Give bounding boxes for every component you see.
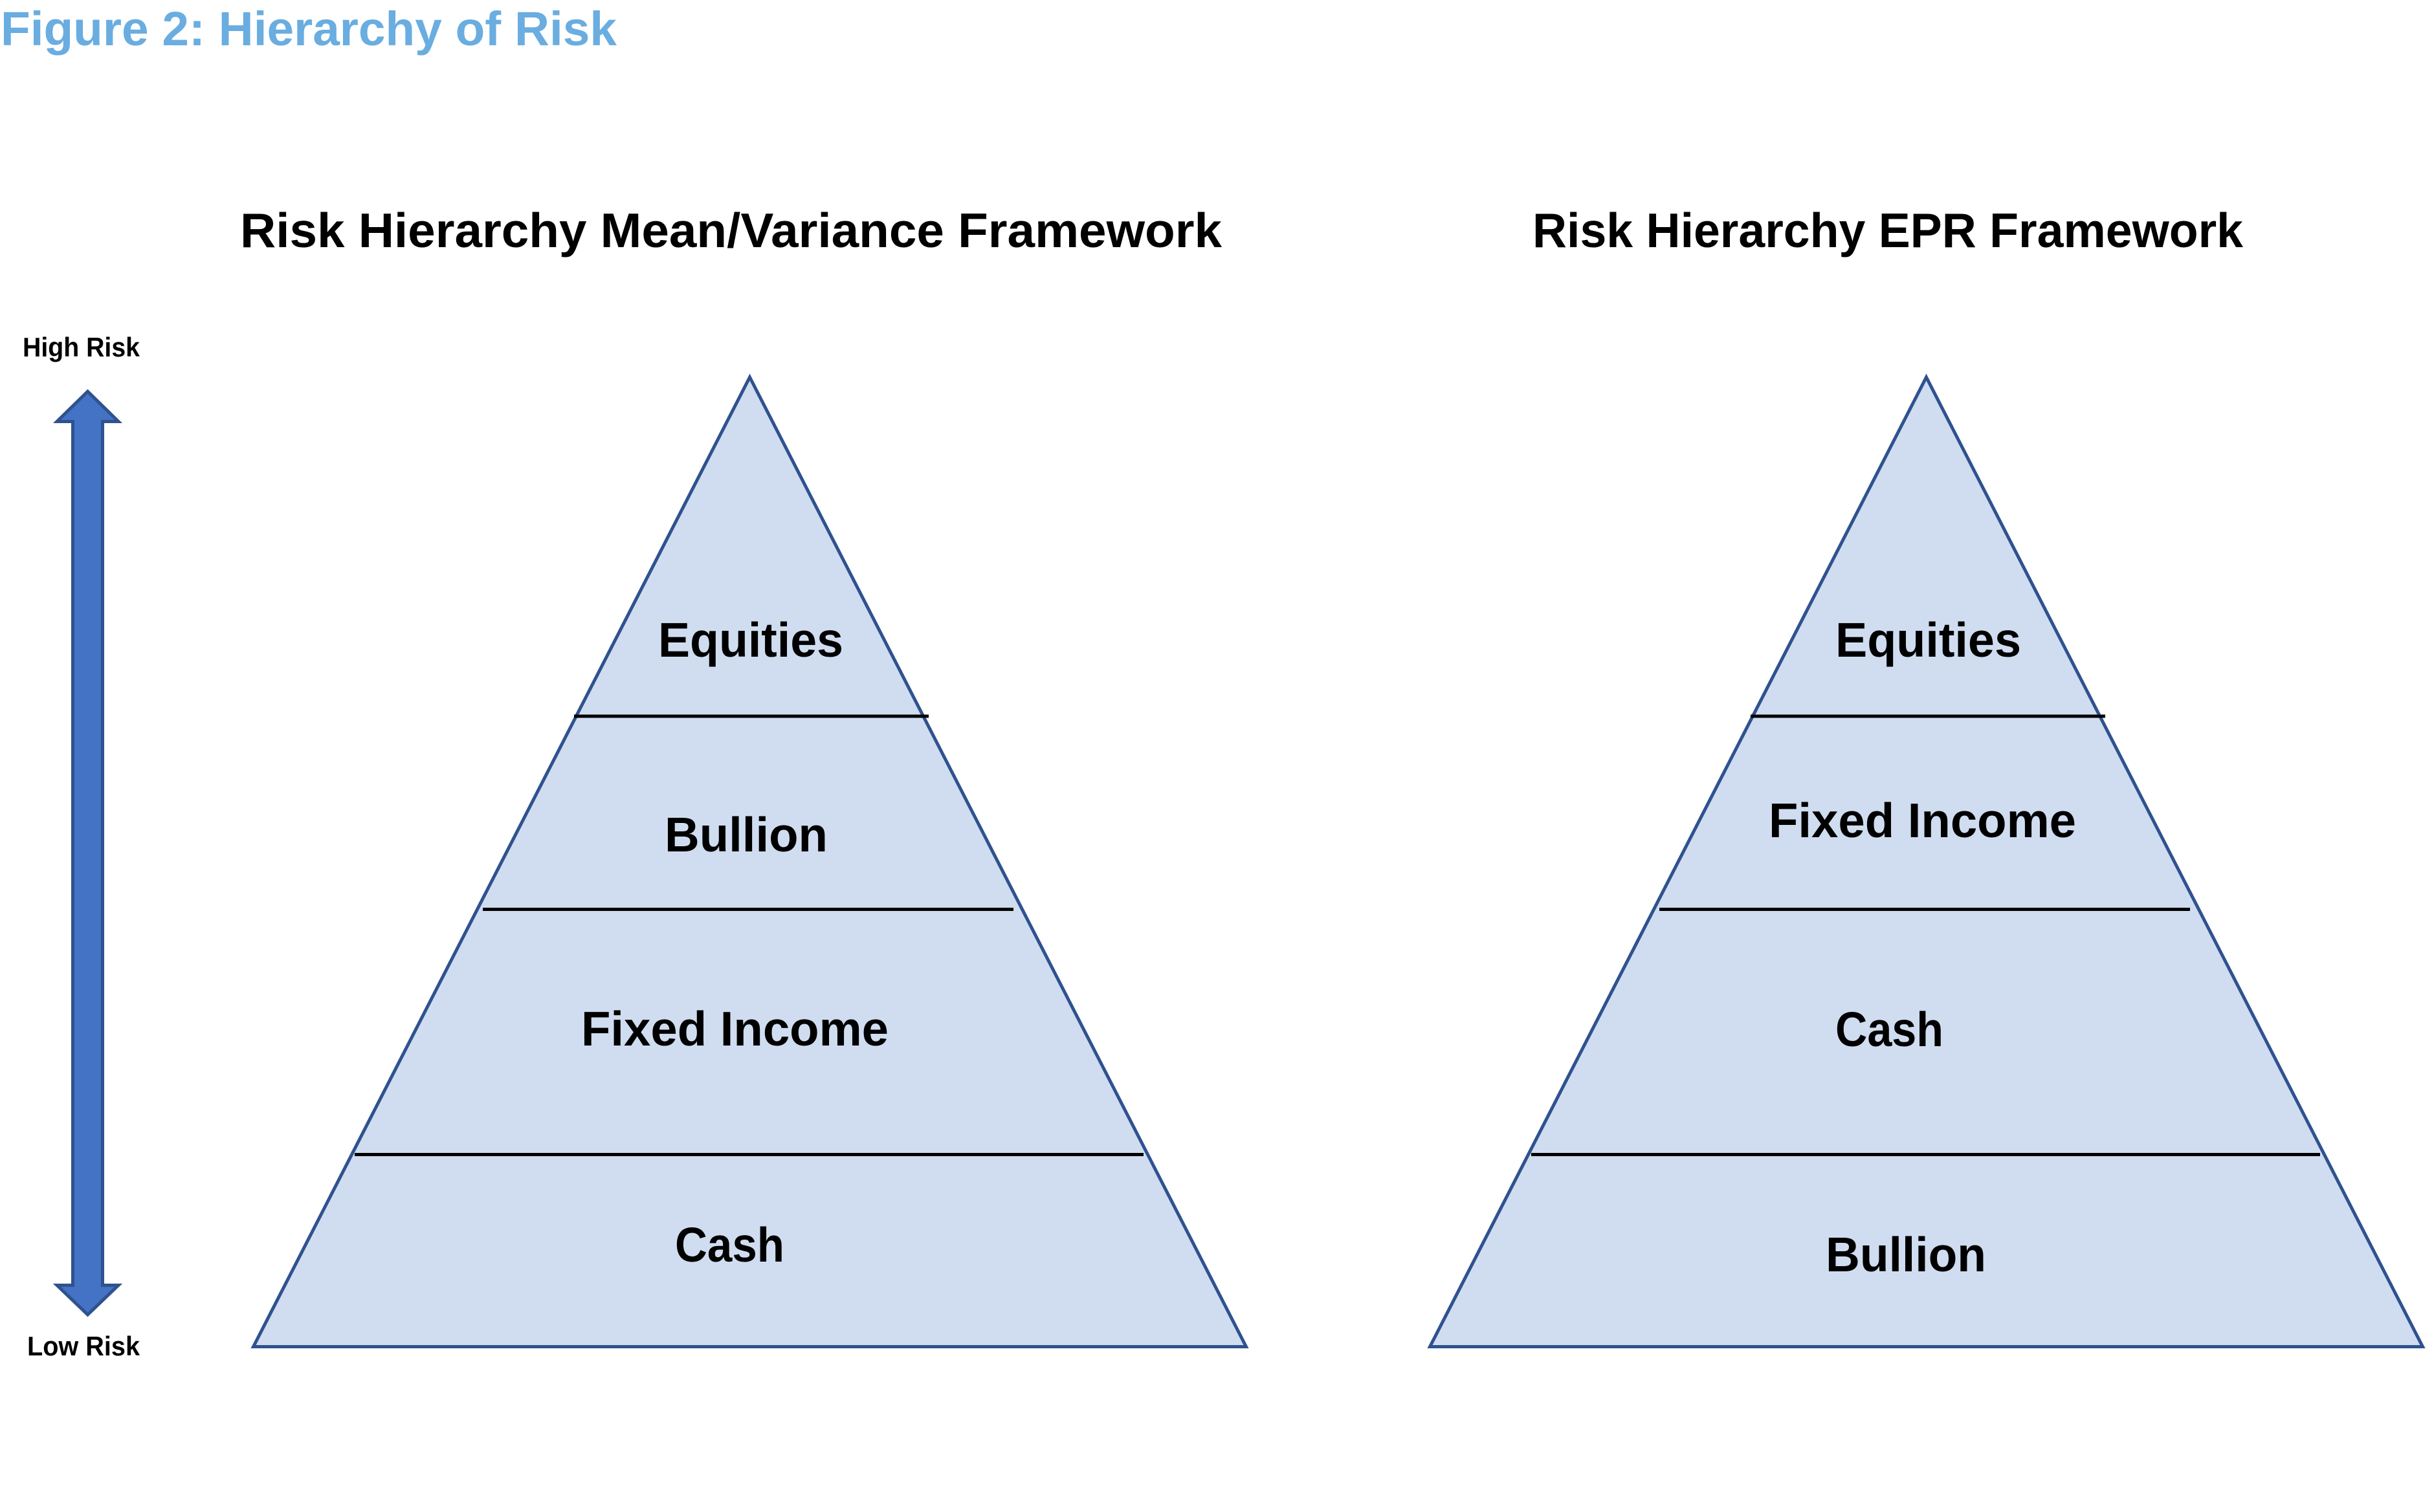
arrow: risk scale [57, 391, 118, 1315]
tier: bullion: Bullion [1826, 1227, 1986, 1282]
tier: equities: Equities [658, 613, 843, 667]
heading: mean/variance framework: Risk Hierarchy Mean/Variance Framework [240, 203, 1222, 257]
tier: fixed income: Fixed Income [1769, 793, 2076, 848]
tier: cash: Cash [675, 1218, 784, 1272]
pyramid shape [1430, 377, 2423, 1347]
tier: fixed income: Fixed Income [581, 1002, 889, 1056]
label: high risk: High Risk [23, 332, 140, 362]
panel: mean/variance pyramid [254, 377, 1246, 1347]
heading: EPR framework: Risk Hierarchy EPR Framework [1532, 203, 2243, 257]
label: low risk: Low Risk [27, 1331, 140, 1361]
title: Figure 2: Hierarchy of Risk [1, 2, 617, 56]
tier: equities: Equities [1835, 613, 2021, 667]
tier: cash: Cash [1835, 1002, 1943, 1057]
tier dividers [1531, 716, 2320, 1154]
panel: EPR pyramid [1430, 377, 2423, 1347]
tier: bullion: Bullion [665, 807, 828, 862]
pyramid shape [254, 377, 1246, 1347]
tier dividers [355, 716, 1144, 1154]
